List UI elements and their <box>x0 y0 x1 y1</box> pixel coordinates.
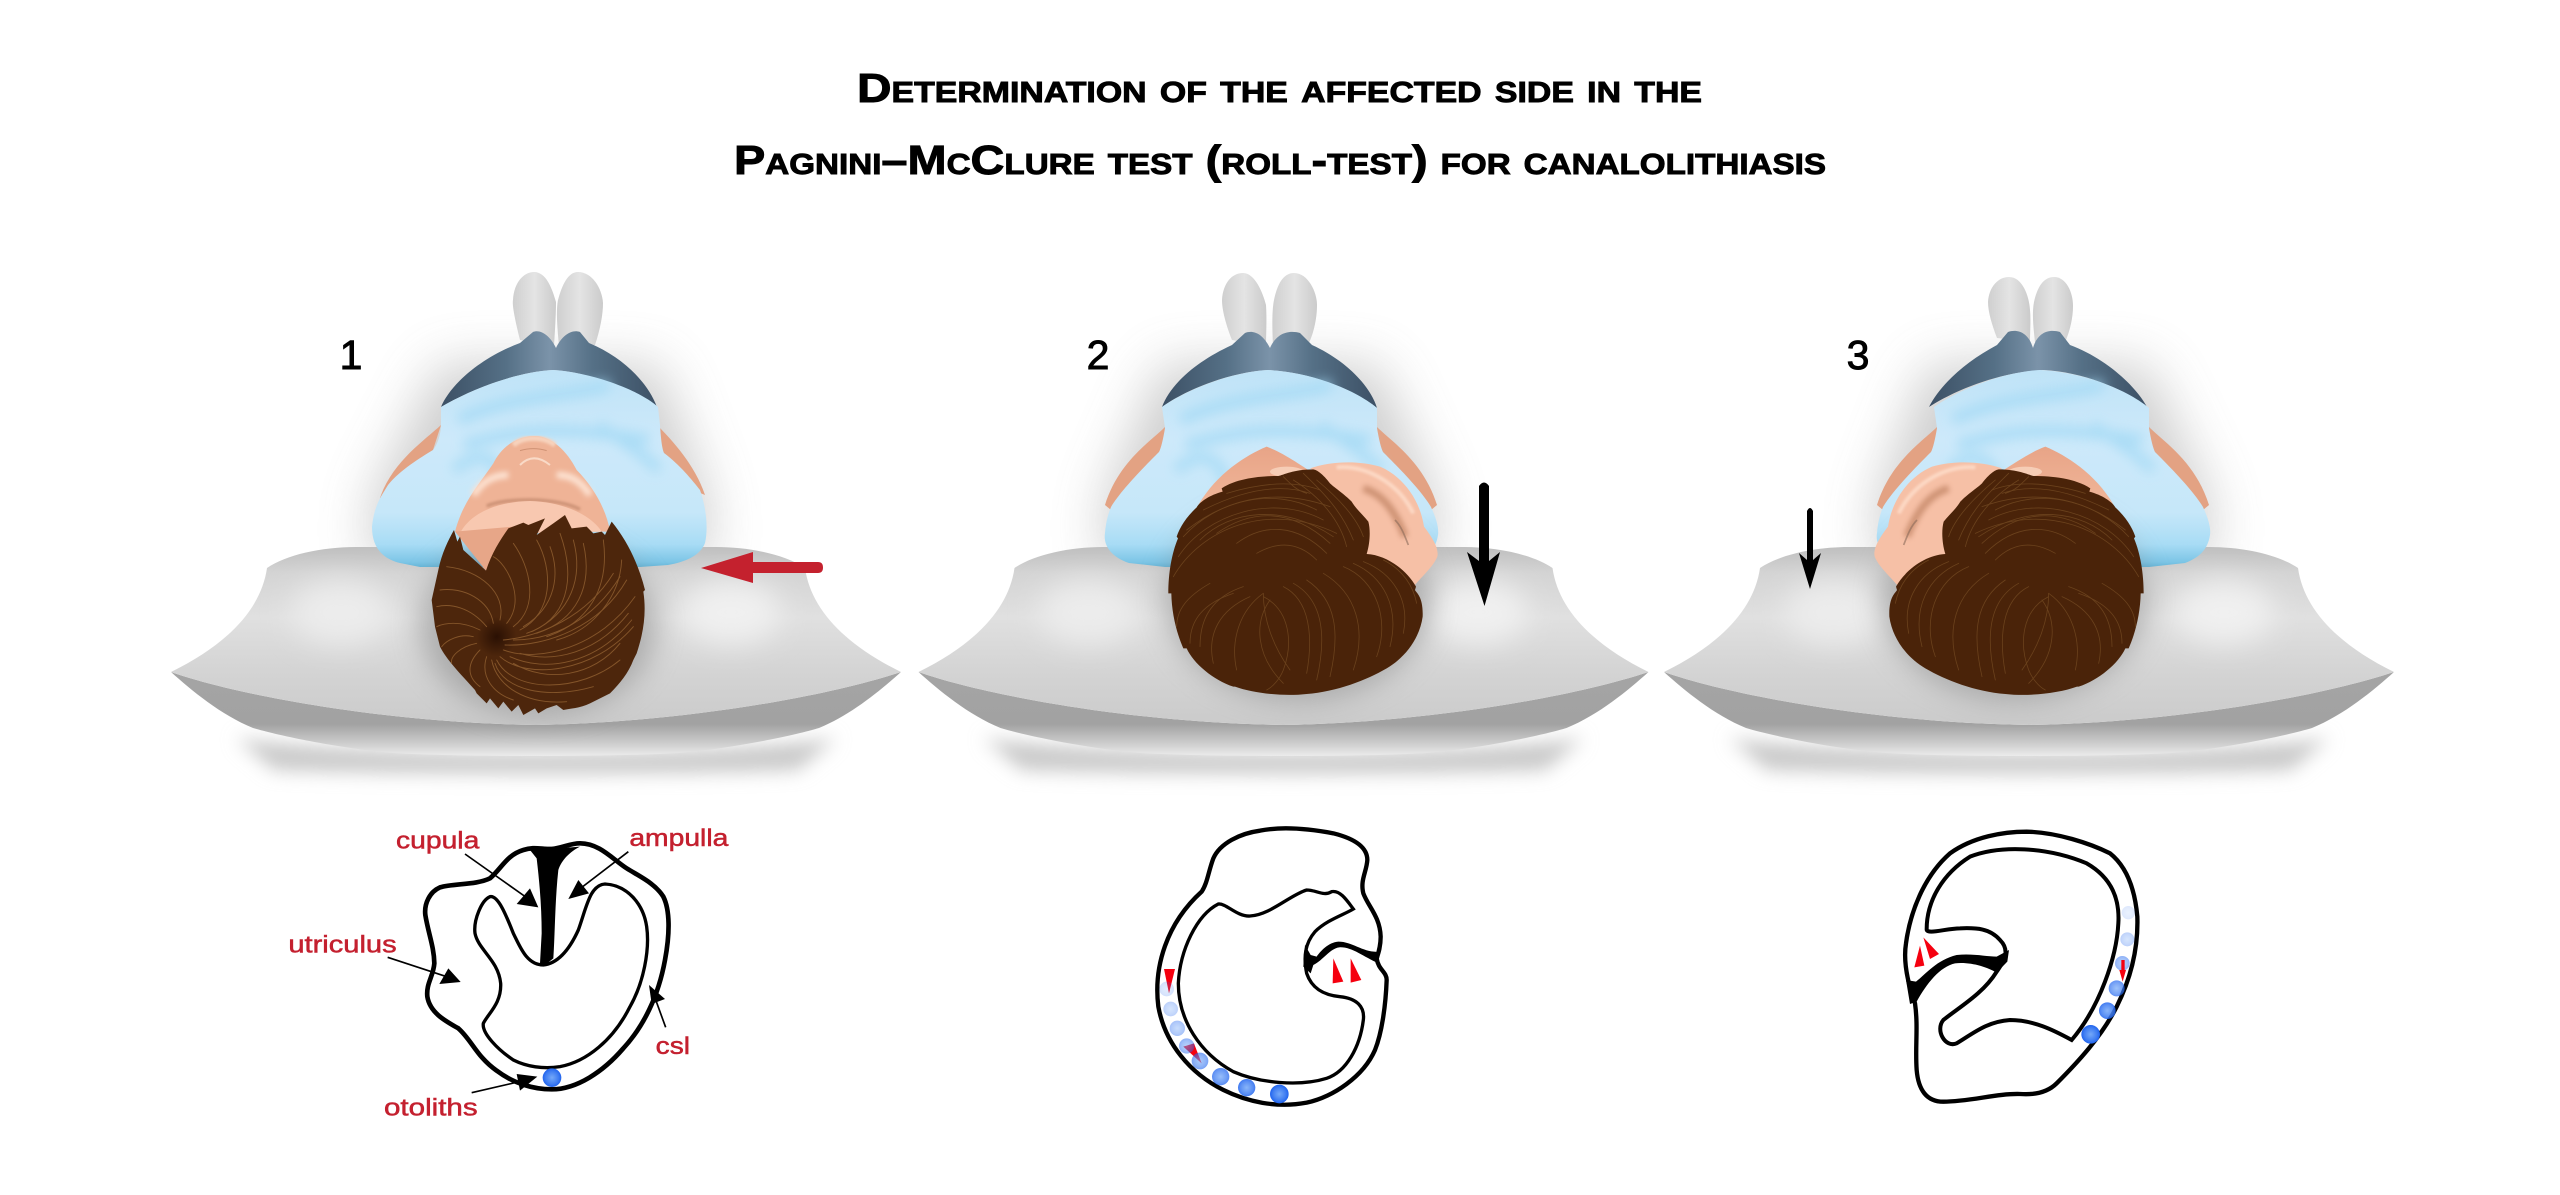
otoliths moving along canal <box>2081 906 2135 1044</box>
shirt 1 <box>372 370 707 567</box>
step number 2: 2 <box>1087 332 1109 378</box>
trousers 2 <box>1162 332 1377 408</box>
legs 1 <box>513 272 603 346</box>
labels: utriculus <box>288 932 397 959</box>
head 3: profile turned left, hair from above <box>1874 447 2144 695</box>
black arrow, large, pointing down <box>1467 482 1500 606</box>
red triangles: cupula deflection <box>1164 958 1361 1063</box>
legs 2 <box>1222 273 1317 346</box>
trousers 3 <box>1929 331 2147 407</box>
red triangles and small arrow <box>1914 937 2126 982</box>
title <box>734 65 1826 183</box>
labels: csl <box>656 1033 690 1060</box>
cupula <box>530 847 580 965</box>
labels: cupula <box>396 827 480 854</box>
head shadow on pillow 1 <box>420 535 656 715</box>
title: Pagnini–McClure test (roll-test) for canalolithiasis <box>734 137 1826 183</box>
shirt 3 <box>1877 370 2210 567</box>
panel 3: head rotated to the left <box>1664 277 2394 774</box>
head 1: chin, neck and hair with whorl <box>432 436 645 715</box>
title: Determination of the affected side in the <box>857 65 1702 111</box>
label arrows <box>388 852 666 1093</box>
pillow 1 <box>171 547 901 774</box>
otolith ball <box>543 1068 561 1087</box>
cupula band <box>1303 942 1380 973</box>
labels: ampulla <box>629 825 729 852</box>
pillow 2 <box>918 547 1648 774</box>
red arrow pointing left toward head <box>701 552 823 583</box>
diagram 3: canal with otoliths moving opposite way <box>1905 832 2137 1102</box>
labels: otoliths <box>384 1095 478 1122</box>
step number 1: 1 <box>340 332 362 378</box>
panel 1: patient lying supine, head centred <box>171 272 901 774</box>
panel 2: head rotated to the right <box>918 273 1648 774</box>
step number 3: 3 <box>1847 332 1869 378</box>
labels <box>288 825 729 1122</box>
head 2: profile turned right, hair from above <box>1168 447 1438 695</box>
otoliths moving along canal <box>1159 982 1289 1103</box>
head shadow on pillow 2 <box>1166 500 1430 700</box>
legs 3 <box>1988 277 2073 342</box>
cupula band <box>1906 950 2009 1004</box>
shirt 2 <box>1105 370 1438 567</box>
trousers 1 <box>441 331 658 410</box>
pillow 3 <box>1664 547 2394 774</box>
black arrow, small, pointing down <box>1799 508 1821 589</box>
diagram 2: canal with otoliths moving <box>1157 828 1387 1105</box>
head shadow on pillow 3 <box>1882 500 2146 700</box>
diagram 1: semicircular canal with labels <box>288 825 729 1122</box>
